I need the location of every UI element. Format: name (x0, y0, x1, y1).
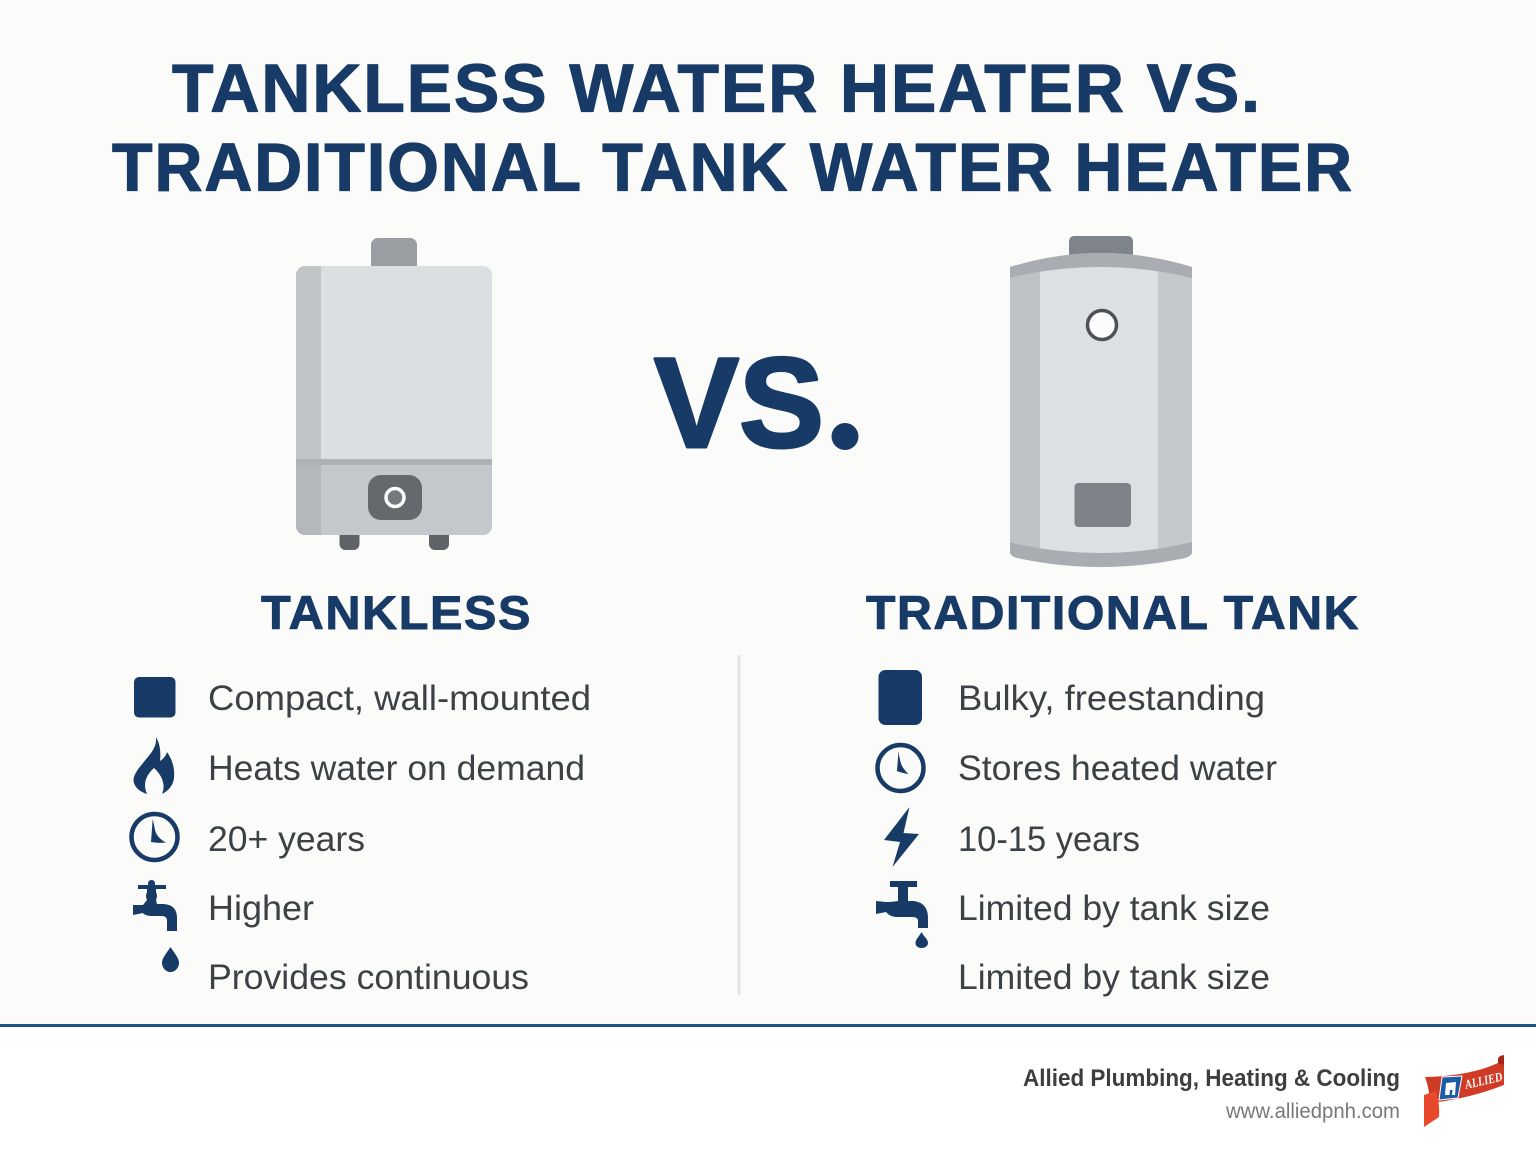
list: tankless features (132, 677, 591, 997)
footer (0, 1024, 1536, 1154)
illustration: traditional tank water heater (1010, 236, 1192, 567)
heading: traditional tank: TRADITIONAL TANK (866, 586, 1360, 639)
icon: clock (132, 814, 178, 860)
website: www.alliedpnh.com (1225, 1100, 1400, 1123)
text: cost: Higher (208, 889, 314, 928)
text: capacity: Limited by tank size (958, 889, 1270, 928)
logo: allied ribbon: ALLIED (1463, 1069, 1504, 1092)
icon: flame (133, 737, 174, 794)
text: bulky: Bulky, freestanding (958, 679, 1265, 718)
vs label: VS (654, 332, 824, 475)
list: traditional tank features (876, 670, 1277, 997)
icon: faucet with drop (876, 881, 928, 948)
icon: faucet (133, 880, 177, 931)
illustration: tankless water heater (296, 238, 492, 550)
title (112, 50, 1354, 206)
text: heats: Heats water on demand (208, 749, 585, 788)
icon: compact square (134, 677, 176, 718)
icon: lightning bolt (884, 807, 919, 867)
icon: water drop (162, 947, 179, 972)
title: TRADITIONAL TANK WATER HEATER (112, 130, 1354, 206)
text: stores: Stores heated water (958, 749, 1277, 788)
icon: clock (878, 745, 924, 791)
heading: tankless: TANKLESS (261, 586, 532, 639)
company name: Allied Plumbing, Heating & Cooling (1023, 1065, 1400, 1092)
text: flow: Limited by tank size (958, 958, 1270, 997)
vs label: . (841, 406, 852, 450)
logo: allied ribbon (1424, 1055, 1504, 1127)
text: continuous: Provides continuous (208, 958, 529, 997)
text: lifespan: 20+ years (208, 820, 365, 859)
text: lifespan: 10-15 years (958, 820, 1140, 859)
title: TANKLESS WATER HEATER VS. (172, 50, 1262, 126)
icon: bulky rectangle (878, 670, 922, 725)
text: compact: Compact, wall-mounted (208, 679, 591, 718)
